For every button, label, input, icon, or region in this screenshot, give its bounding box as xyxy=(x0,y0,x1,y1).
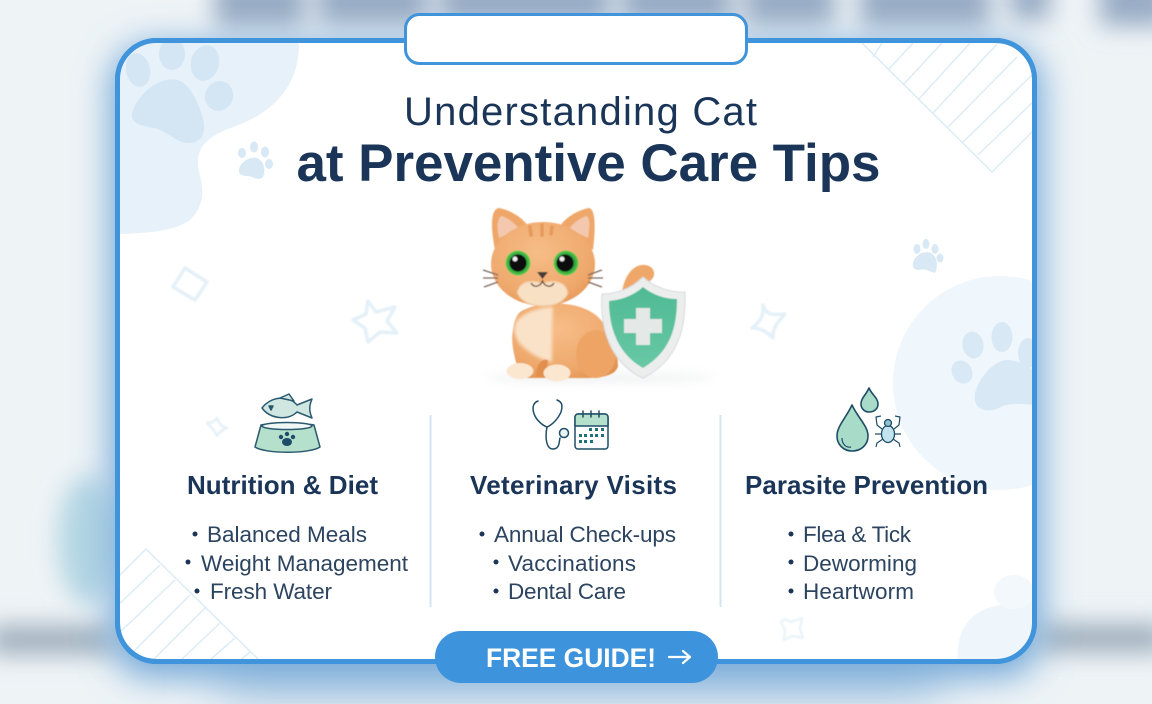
top empty label pill xyxy=(406,14,746,64)
heading: veterinary: Veterinary Visits xyxy=(470,470,677,500)
title xyxy=(296,90,880,193)
list: veterinary items: Dental Care xyxy=(508,579,626,604)
decoration: top-left blob with paw xyxy=(118,38,299,234)
icon: stethoscope and calendar xyxy=(533,400,608,449)
decoration: small paw top-left xyxy=(238,142,273,179)
cat paws xyxy=(506,363,534,379)
cat ears xyxy=(492,208,528,250)
decoration: bottom-left hatch xyxy=(118,549,262,663)
cat head xyxy=(491,222,595,306)
column dividers xyxy=(430,415,720,607)
list: nutrition items: Fresh Water xyxy=(210,579,332,604)
cat eyes xyxy=(506,250,530,276)
list: veterinary items: Vaccinations xyxy=(508,551,636,576)
shield xyxy=(602,277,685,378)
list: nutrition items: Weight Management xyxy=(201,551,409,576)
decoration: small paw right xyxy=(913,239,944,273)
title: Understanding Cat xyxy=(404,90,757,134)
list: parasite items: Deworming xyxy=(803,551,917,576)
list: veterinary items xyxy=(480,522,676,604)
list: parasite items: Flea & Tick xyxy=(803,522,912,547)
decoration: bottom-right blob xyxy=(958,575,1032,659)
heading: nutrition: Nutrition & Diet xyxy=(187,470,378,500)
button: free guide: FREE GUIDE! xyxy=(486,643,656,673)
column: veterinary visits xyxy=(470,400,677,604)
icon: arrow xyxy=(669,651,690,663)
list: nutrition items: Balanced Meals xyxy=(207,522,367,547)
icon: drops and tick xyxy=(837,388,901,451)
title: at Preventive Care Tips xyxy=(296,134,880,193)
list: parasite items: Heartworm xyxy=(803,579,914,604)
column: nutrition and diet xyxy=(186,394,409,604)
decoration: right circle with paw xyxy=(893,276,1032,490)
list: nutrition items xyxy=(186,522,409,604)
column: parasite prevention xyxy=(745,388,988,604)
heading: parasite: Parasite Prevention xyxy=(745,470,988,500)
decoration: stars and outlines xyxy=(173,268,803,640)
decoration: top-right hatch xyxy=(860,41,1036,172)
card decorations xyxy=(118,38,1107,663)
main card xyxy=(118,38,1107,663)
cat nose and mouth xyxy=(537,272,548,279)
illustration: cat with shield xyxy=(483,208,715,382)
cat tail xyxy=(622,265,654,298)
list: veterinary items: Annual Check-ups xyxy=(494,522,676,547)
list: parasite items xyxy=(788,522,917,604)
button: free guide xyxy=(435,631,718,683)
cat body xyxy=(512,304,618,378)
cat whiskers xyxy=(483,270,603,287)
icon: fish over bowl xyxy=(255,394,320,452)
